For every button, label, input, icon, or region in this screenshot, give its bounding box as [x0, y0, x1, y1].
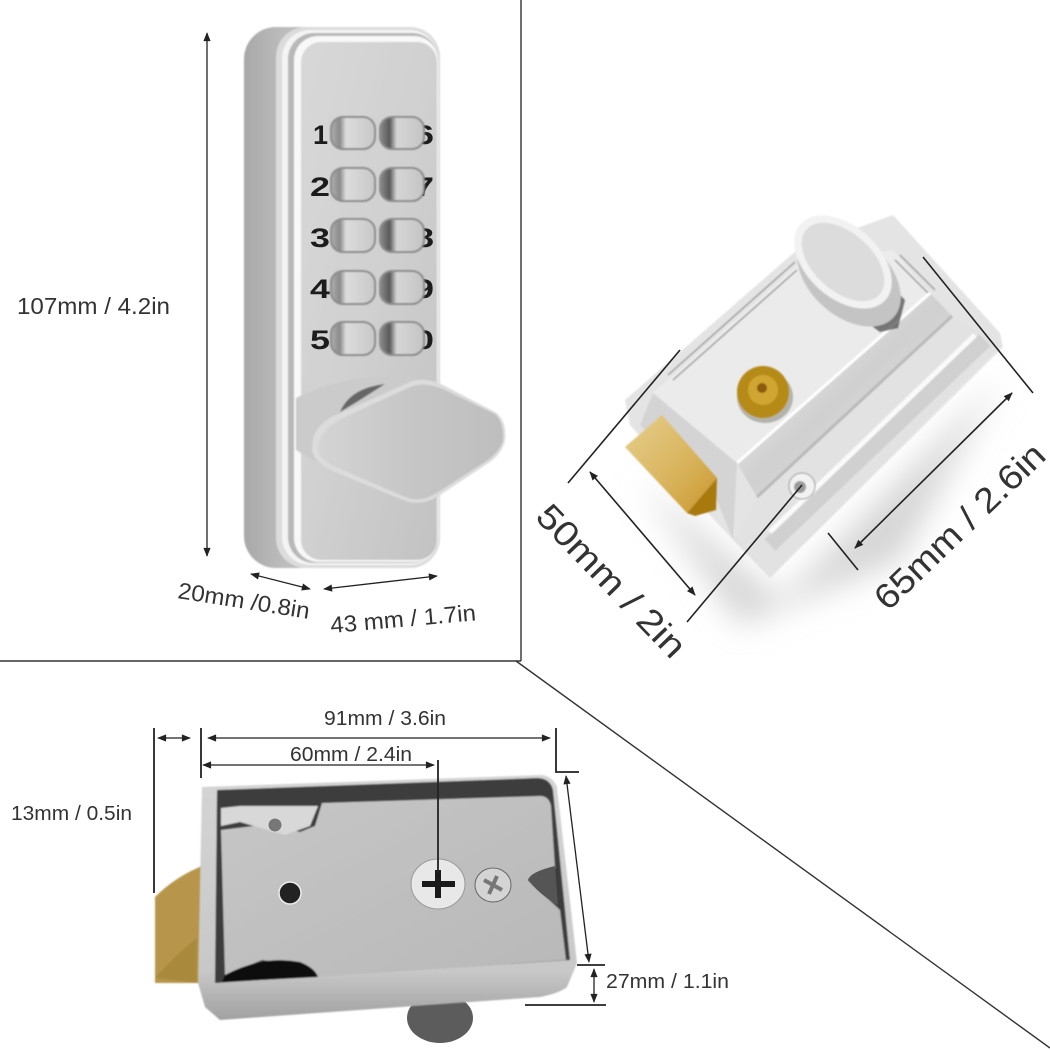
- rivet: [268, 818, 282, 832]
- small screw: [475, 868, 511, 902]
- keypad lock body: [244, 27, 440, 568]
- height label: 107mm / 4.2in: [17, 293, 170, 319]
- label 13mm: 13mm / 0.5in: [11, 803, 132, 825]
- keypad buttons and digits: 1: [313, 120, 328, 150]
- depth label: 20mm /0.8in: [176, 577, 312, 624]
- keypad buttons and digits: [310, 117, 434, 355]
- dimension lines: [154, 728, 606, 1005]
- keypad buttons and digits: 7: [414, 172, 434, 202]
- thumb turn: [296, 376, 505, 503]
- latch case: [198, 775, 577, 1020]
- brass bolt: [625, 415, 717, 516]
- knob: [777, 197, 920, 346]
- 65mm label: 65mm / 2.6in: [866, 435, 1050, 618]
- brass cylinder: [737, 366, 793, 423]
- keypad buttons and digits: 6: [414, 120, 434, 150]
- label 91mm: 91mm / 3.6in: [324, 708, 446, 730]
- notch: [528, 866, 558, 905]
- center screw: [411, 859, 465, 909]
- 50mm label: 50mm / 2in: [528, 496, 694, 666]
- latch shadow: [640, 380, 1000, 625]
- screw hole: [789, 473, 815, 499]
- keypad buttons and digits: 9: [414, 274, 434, 304]
- bottom knob stub: [407, 993, 473, 1043]
- label 27mm: 27mm / 1.1in: [606, 971, 729, 993]
- latch body: [625, 215, 1003, 578]
- width label: 43 mm / 1.7in: [329, 599, 477, 638]
- panel: keypad lock front view: [17, 27, 505, 638]
- keypad buttons and digits: 8: [414, 223, 434, 253]
- brass bolt: [155, 866, 202, 983]
- dimension lines 50mm: [568, 350, 802, 622]
- keypad buttons and digits: 5: [310, 325, 330, 355]
- width dimension arrow: [324, 576, 437, 589]
- panel: latch back view: [11, 708, 729, 1043]
- keypad buttons and digits: 2: [310, 172, 330, 202]
- dimension lines 65mm: [828, 257, 1033, 570]
- depth dimension arrow: [251, 574, 310, 589]
- keypad buttons and digits: 0: [414, 325, 434, 355]
- hole: [279, 882, 301, 904]
- keypad buttons and digits: 3: [310, 223, 330, 253]
- label 60mm: 60mm / 2.4in: [290, 744, 412, 766]
- keypad buttons and digits: 4: [310, 274, 330, 304]
- panel: rim latch perspective view: [528, 197, 1050, 666]
- height dimension arrow: [206, 33, 208, 556]
